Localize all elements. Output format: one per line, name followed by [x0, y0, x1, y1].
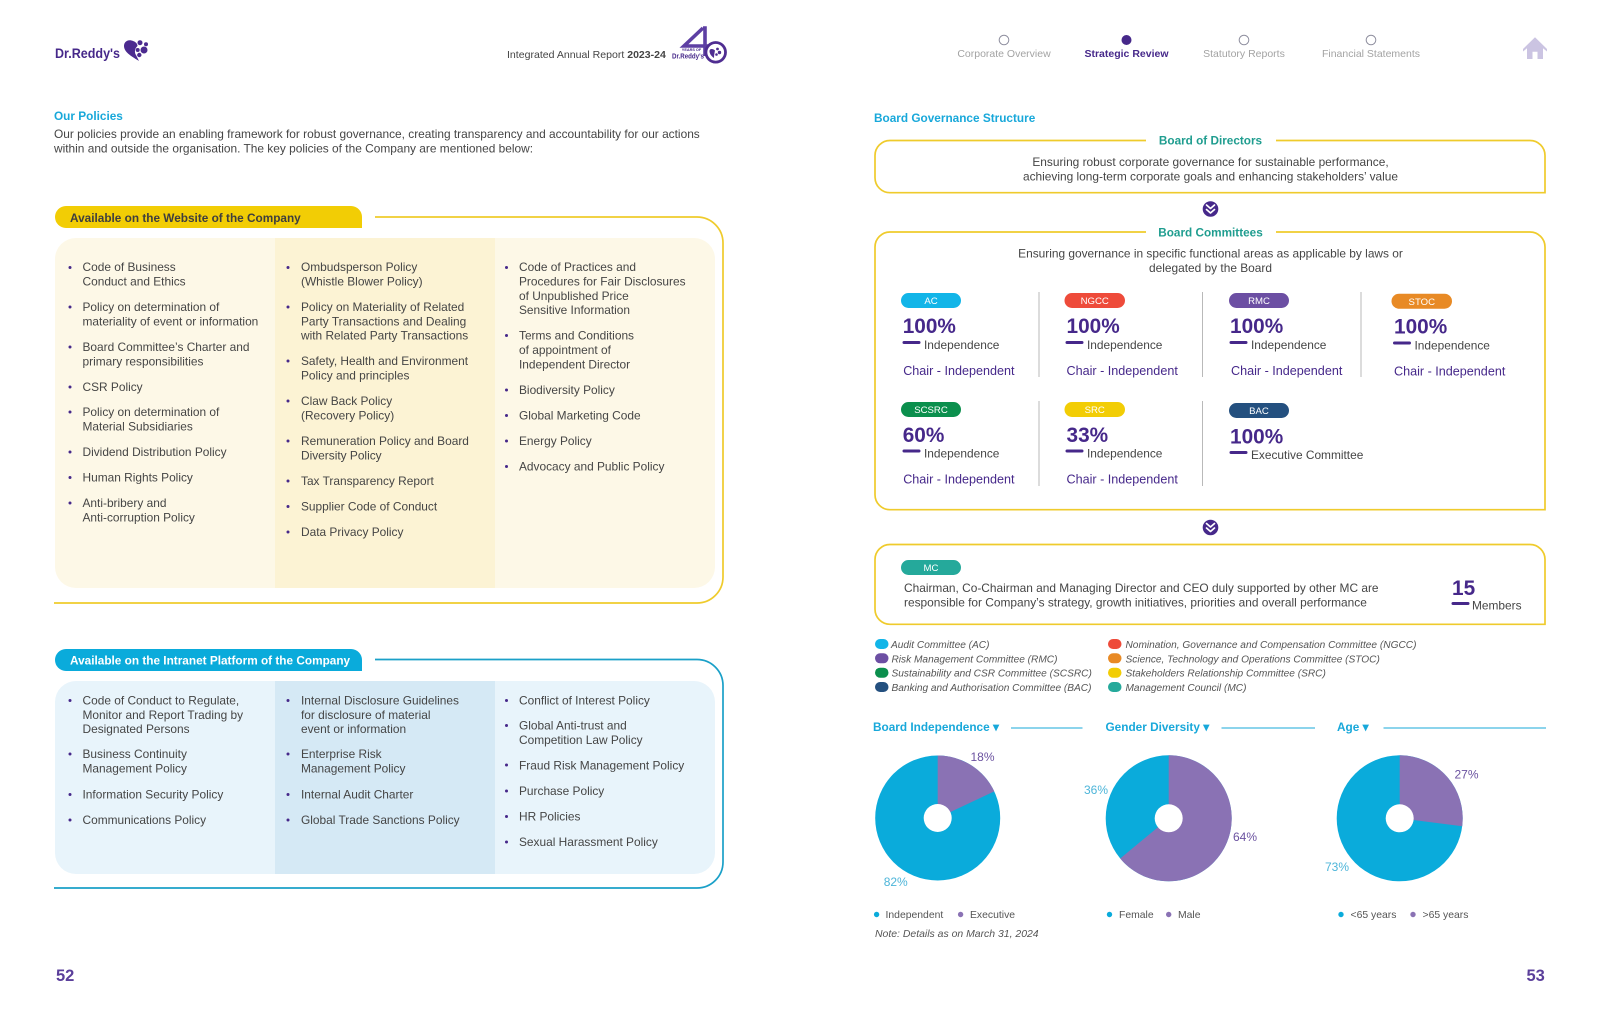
policy list column 1: Dividend Distribution Policy	[82, 445, 227, 459]
policy list column 2: Enterprise Risk	[301, 747, 382, 761]
policy list column 2: event or information	[301, 722, 406, 736]
icon: double chevron down	[1203, 520, 1218, 535]
policy list column 1	[68, 694, 243, 827]
committee: SCSRC	[901, 402, 1015, 486]
box description: achieving long-term corporate goals and enhancing stakeholders’ value	[1023, 169, 1398, 183]
policy list column 1: Business Continuity	[82, 747, 187, 761]
heading tab: Available on the Intranet Platform of the Company	[70, 654, 351, 668]
committee: NGCC	[1064, 293, 1178, 378]
intro paragraph: Our policies provide an enabling framework for robust governance, creating transparency and accountability for our actions	[54, 127, 700, 141]
icon: home	[1523, 37, 1547, 59]
policy list column 1: Policy on determination of	[82, 405, 220, 419]
legend: committee names: Risk Management Committee (RMC)	[892, 654, 1057, 665]
policy list column 2: Tax Transparency Report	[301, 474, 435, 488]
committee: NGCC: Chair - Independent	[1066, 364, 1178, 378]
committee: BAC: BAC	[1249, 406, 1269, 417]
policy list column 2	[286, 694, 460, 827]
policy list column 3: of appointment of	[519, 343, 612, 357]
committee: RMC	[1229, 293, 1343, 378]
chart: Gender Diversity	[1084, 720, 1315, 921]
policy list column 1: materiality of event or information	[82, 314, 258, 328]
policy list column 3: Procedures for Fair Disclosures	[519, 274, 686, 288]
page number 52: 52	[56, 967, 74, 985]
policy list column 1: Anti-bribery and	[82, 496, 166, 510]
policy list column 1: Conduct and Ethics	[82, 274, 186, 288]
committee: AC: 100%	[903, 315, 956, 338]
header: section navigation: Financial Statements	[1322, 48, 1420, 60]
legend: Independent	[886, 910, 943, 921]
legend: committee names	[875, 639, 1416, 694]
panel background	[55, 238, 715, 588]
committee: SRC: 33%	[1066, 424, 1108, 447]
policy list column 3: Advocacy and Public Policy	[519, 460, 664, 474]
chart heading: Age ▾	[1337, 720, 1370, 734]
policy list column 2: Remuneration Policy and Board	[301, 434, 469, 448]
legend: committee names: Management Council (MC)	[1126, 683, 1246, 694]
policy list column 1: Management Policy	[82, 762, 187, 776]
policy list column 3: Terms and Conditions	[519, 328, 634, 342]
value labels: 82%	[884, 875, 908, 889]
policy list column 1: Information Security Policy	[82, 788, 223, 802]
policy list column 3: Biodiversity Policy	[519, 383, 615, 397]
panel outline	[54, 217, 723, 603]
policy list column 1: primary responsibilities	[82, 354, 203, 368]
legend: committee names: Science, Technology and Operations Committee (STOC)	[1126, 654, 1380, 665]
policy list column 2: Internal Disclosure Guidelines	[301, 694, 459, 708]
legend: Female	[1119, 910, 1154, 921]
policy list column 3: Purchase Policy	[519, 784, 604, 798]
box description	[1018, 246, 1403, 275]
legend: committee names: Banking and Authorisation Committee (BAC)	[892, 683, 1091, 694]
header: section navigation: Statutory Reports	[1203, 48, 1285, 60]
header: 40 years logo: YEARS OF	[682, 48, 702, 52]
value labels: 64%	[1233, 830, 1257, 844]
box description	[1023, 155, 1398, 183]
policy list column 3: Conflict of Interest Policy	[519, 694, 650, 708]
policy list column 3	[505, 260, 686, 474]
chart: Board Independence	[873, 720, 1082, 921]
committee: SRC: Independence	[1087, 446, 1163, 460]
value labels: 27%	[1454, 768, 1479, 782]
chart: Age	[1325, 720, 1546, 921]
committee: STOC: STOC	[1409, 297, 1435, 308]
panel background	[55, 681, 715, 874]
policy list column 1: Material Subsidiaries	[82, 420, 193, 434]
policy list column 3: Sexual Harassment Policy	[519, 835, 658, 849]
header: 40 years logo: Dr.Reddy's	[672, 51, 704, 60]
committee: SCSRC: Chair - Independent	[903, 472, 1015, 486]
policy list column 1: CSR Policy	[82, 380, 143, 394]
policy list column 3: Fraud Risk Management Policy	[519, 758, 684, 772]
policy list column 1: Board Committee’s Charter and	[82, 340, 250, 354]
policy list column 1: Code of Business	[82, 260, 176, 274]
box description: Ensuring robust corporate governance for sustainable performance,	[1032, 155, 1389, 169]
header: Dr. Reddy's logo: Dr.Reddy's	[55, 45, 120, 61]
members count: Members	[1472, 598, 1522, 612]
policy list column 2	[286, 260, 469, 539]
committee: AC: Independence	[924, 338, 1000, 352]
committee: STOC	[1392, 294, 1506, 378]
legend: committee names: Nomination, Governance and Compensation Committee (NGCC)	[1126, 640, 1416, 651]
policy list column 1: Designated Persons	[82, 722, 190, 736]
policy list column 3	[505, 694, 684, 849]
legend: Male	[1178, 910, 1201, 921]
policy list column 3: Sensitive Information	[519, 303, 630, 317]
MC description: Chairman, Co-Chairman and Managing Director and CEO duly supported by other MC are	[904, 581, 1379, 595]
legend	[874, 910, 1015, 921]
committee: STOC: Chair - Independent	[1394, 364, 1506, 378]
heading tab	[55, 649, 362, 671]
box title: Board of Directors	[1159, 134, 1263, 148]
icon: double chevron down	[1203, 201, 1218, 217]
value labels	[884, 750, 995, 889]
policy list column 2: Policy on Materiality of Related	[301, 300, 464, 314]
header: Dr. Reddy's logo	[55, 40, 148, 61]
policy list column 2: (Recovery Policy)	[301, 408, 394, 422]
legend	[1107, 910, 1201, 921]
policy list column 2: Policy and principles	[301, 368, 409, 382]
committee: SRC: Chair - Independent	[1066, 472, 1178, 486]
committee: RMC: Independence	[1251, 338, 1327, 352]
MC description	[904, 581, 1379, 609]
page number 53: 53	[1526, 967, 1545, 985]
box description: Ensuring governance in specific functional areas as applicable by laws or	[1018, 246, 1403, 260]
heading: Our Policies: Our Policies	[54, 109, 123, 123]
pie	[1337, 755, 1463, 881]
committee: RMC: 100%	[1230, 315, 1283, 338]
panel: Board of Directors	[875, 134, 1545, 193]
policy list column 1	[68, 260, 258, 524]
header: section navigation	[957, 35, 1420, 60]
policy list column 1: Policy on determination of	[82, 300, 220, 314]
committee: RMC: Chair - Independent	[1231, 364, 1343, 378]
policy list column 3: Competition Law Policy	[519, 733, 643, 747]
legend: committee names: Audit Committee (AC)	[890, 640, 989, 651]
MC pill: MC	[924, 563, 939, 574]
legend	[1338, 910, 1468, 921]
policy list column 3: Energy Policy	[519, 434, 592, 448]
footnote: Note: Details as on March 31, 2024	[875, 929, 1039, 940]
committee: SCSRC: SCSRC	[914, 405, 948, 416]
policy list column 2: Safety, Health and Environment	[301, 354, 469, 368]
policy list column 2: Management Policy	[301, 762, 405, 776]
committee: STOC: 100%	[1394, 316, 1447, 338]
committee: NGCC: Independence	[1087, 338, 1163, 352]
header: report title: Integrated Annual Report 2023-24	[507, 49, 666, 61]
policy list column 1: Communications Policy	[82, 813, 206, 827]
policy list column 2: for disclosure of material	[301, 708, 431, 722]
legend: committee names: Stakeholders Relationship Committee (SRC)	[1126, 669, 1326, 680]
box outline	[875, 544, 1545, 624]
members count: 15	[1452, 577, 1475, 600]
committee: STOC: Independence	[1414, 338, 1490, 352]
pie	[1106, 755, 1232, 881]
members count	[1452, 577, 1522, 612]
MC description: responsible for Company’s strategy, growth initiatives, priorities and overall performance	[904, 595, 1367, 609]
committee: SCSRC: Independence	[924, 446, 1000, 460]
header: 40 years logo	[672, 28, 726, 62]
panel: intranet policies	[54, 649, 723, 888]
column dividers	[1039, 292, 1361, 486]
chart heading: Board Independence ▾	[873, 720, 1000, 734]
value labels: 18%	[970, 750, 995, 764]
policy list column 1: Monitor and Report Trading by	[82, 708, 243, 722]
policy list column 3: Independent Director	[519, 358, 630, 372]
policy list column 1: Code of Conduct to Regulate,	[82, 694, 239, 708]
policy list column 2: Internal Audit Charter	[301, 788, 413, 802]
box title: Board Committees	[1158, 226, 1263, 240]
committee: BAC: Executive Committee	[1251, 448, 1364, 462]
policy list column 3: Global Anti-trust and	[519, 718, 627, 732]
value labels	[1084, 783, 1257, 844]
policy list column 2: Claw Back Policy	[301, 394, 392, 408]
panel outline	[54, 660, 723, 888]
committee: SCSRC: 60%	[903, 424, 944, 447]
policy list column 1: Anti-corruption Policy	[82, 510, 195, 524]
policy list column 2: Data Privacy Policy	[301, 525, 403, 539]
heading tab	[55, 206, 362, 228]
MC pill	[901, 560, 961, 575]
intro paragraph	[53, 127, 700, 155]
legend: committee names: Sustainability and CSR Committee (SCSRC)	[892, 669, 1092, 680]
header: section navigation: Corporate Overview	[957, 48, 1051, 60]
legend: <65 years	[1350, 910, 1396, 921]
policy list column 2: (Whistle Blower Policy)	[301, 274, 423, 288]
policy list column 2: Ombudsperson Policy	[301, 260, 417, 274]
committee: NGCC: 100%	[1066, 315, 1120, 338]
panel: website policies	[54, 206, 723, 603]
intro paragraph: within and outside the organisation. The key policies of the Company are mentioned below:	[53, 141, 533, 155]
panel: Management Council	[875, 544, 1545, 624]
pie	[875, 756, 1000, 880]
panel: Board Committees	[875, 226, 1545, 510]
header: section navigation: Strategic Review	[1084, 48, 1169, 60]
policy list column 2: Supplier Code of Conduct	[301, 500, 438, 514]
committee: RMC: RMC	[1248, 296, 1270, 307]
policy list column 3: Code of Practices and	[519, 260, 636, 274]
committee: AC: AC	[924, 296, 938, 307]
box outline	[875, 232, 1545, 510]
heading: Board Governance Structure: Board Governance Structure	[874, 111, 1036, 125]
policy list column 3: HR Policies	[519, 810, 581, 824]
box outline	[875, 140, 1545, 193]
committee: NGCC: NGCC	[1081, 296, 1109, 307]
committee: AC: Chair - Independent	[903, 364, 1015, 378]
value labels	[1325, 768, 1479, 874]
policy list column 2: Diversity Policy	[301, 448, 382, 462]
value labels: 73%	[1325, 860, 1349, 874]
policy list column 1: Human Rights Policy	[82, 470, 193, 484]
committee: SRC: SRC	[1085, 405, 1105, 416]
box description: delegated by the Board	[1149, 261, 1272, 275]
legend: >65 years	[1422, 910, 1468, 921]
chart heading: Gender Diversity ▾	[1106, 720, 1210, 734]
legend: Executive	[970, 910, 1015, 921]
heading tab: Available on the Website of the Company	[70, 211, 301, 225]
policy list column 2: Party Transactions and Dealing	[301, 314, 466, 328]
value labels: 36%	[1084, 783, 1108, 797]
committee: AC	[901, 293, 1015, 378]
committee: SRC	[1064, 402, 1178, 486]
policy list column 2: with Related Party Transactions	[300, 329, 468, 343]
policy list column 3: of Unpublished Price	[519, 289, 629, 303]
policy list column 2: Global Trade Sanctions Policy	[301, 813, 460, 827]
committee: BAC	[1229, 403, 1364, 462]
committee: BAC: 100%	[1230, 426, 1283, 448]
policy list column 3: Global Marketing Code	[519, 408, 641, 422]
